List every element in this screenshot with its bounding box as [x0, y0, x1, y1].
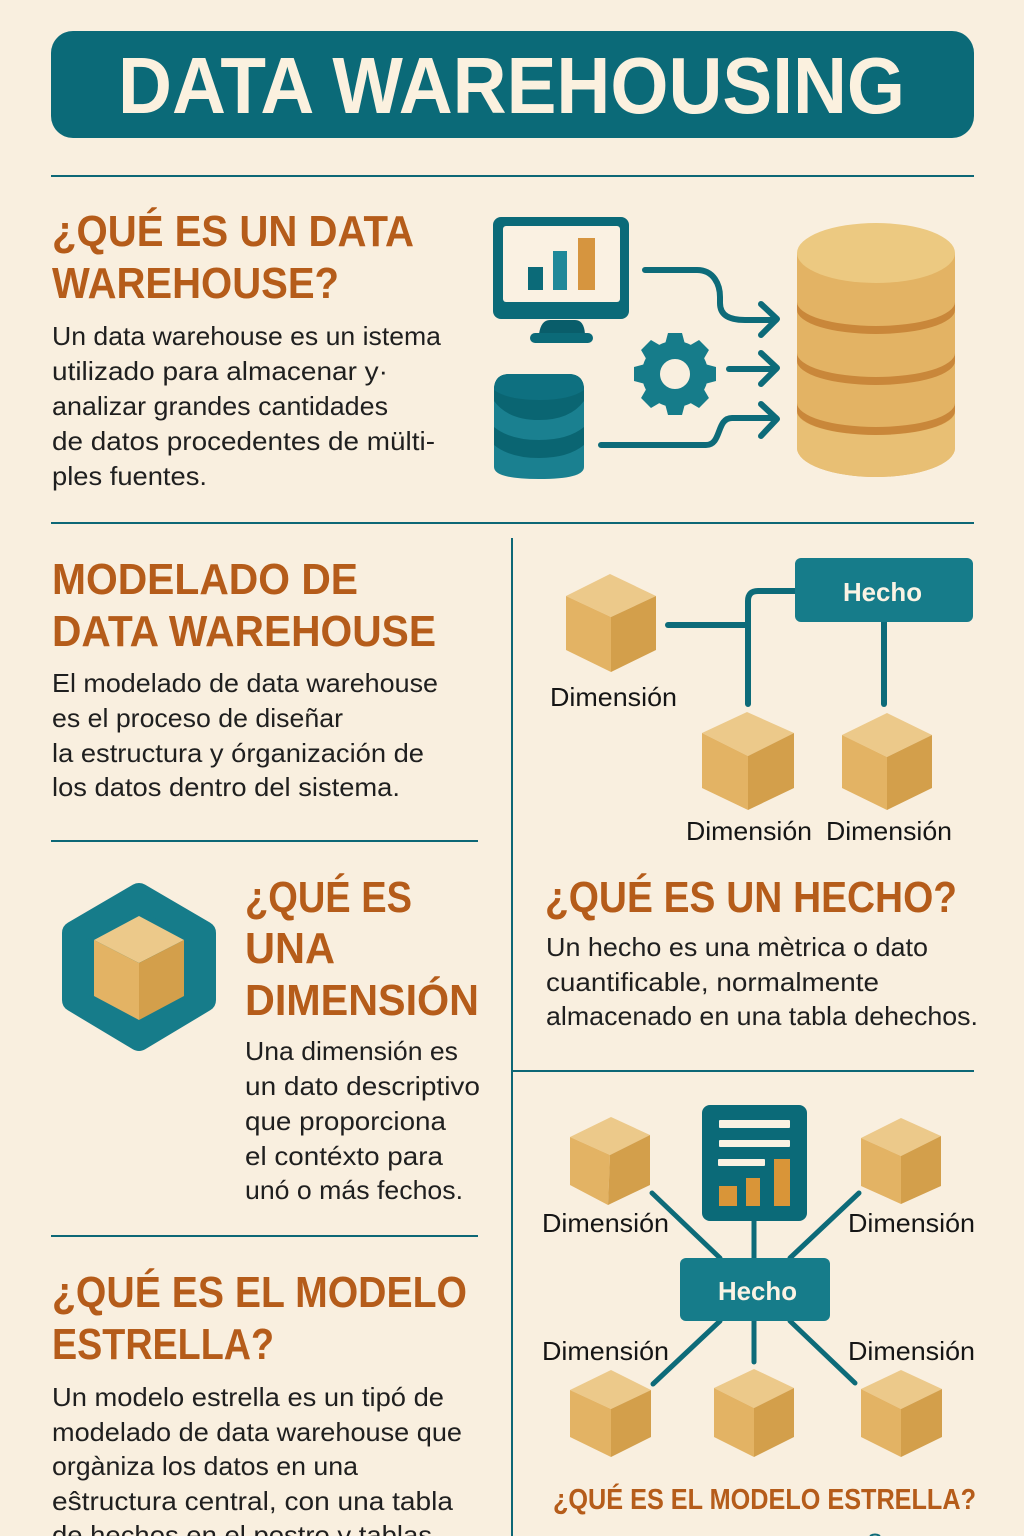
text block: fact definition: cuantificable, normalmente — [546, 967, 879, 997]
panel: what is a fact — [545, 872, 978, 1031]
connector lines — [668, 591, 884, 704]
heading: dimension: ¿QUÉ ES — [245, 872, 412, 922]
text block: modeling definition: es el proceso de diseñar — [52, 703, 343, 733]
panel: what is a dimension — [74, 872, 480, 1205]
text block: data warehouse definition: utilizado para almacenar y· — [52, 356, 388, 386]
text block: dimension definition: el contéxto para — [245, 1141, 444, 1171]
label: dimension bottom left: Dimensión — [542, 1336, 669, 1366]
text block: star model definition: orgàniza los datos en una — [52, 1451, 359, 1481]
fact box — [680, 1258, 830, 1321]
diagram: star schema — [542, 1105, 976, 1516]
text block: data warehouse definition: analizar grandes cantidades — [52, 391, 388, 421]
arrow: gear to warehouse — [729, 353, 777, 384]
icon: cube left — [566, 574, 656, 672]
panel: what is the star model — [52, 1267, 467, 1536]
text block: dimension definition: que proporciona — [245, 1106, 447, 1136]
icon: monitor with bar chart — [493, 217, 629, 343]
text block: fact definition: almacenado en una tabla dehechos. — [546, 1001, 978, 1031]
label: dimension left: Dimensión — [550, 682, 677, 712]
icon: large warehouse cylinder — [797, 223, 955, 477]
icon: cube bottom left — [570, 1370, 651, 1457]
text block: dimension definition — [245, 1036, 480, 1205]
text block: modeling definition: El modelado de data warehouse — [52, 668, 438, 698]
heading: fact: ¿QUÉ ES UN HECHO? — [545, 872, 957, 922]
arrow: monitor to warehouse — [645, 270, 777, 335]
label: dimension top left: Dimensión — [542, 1208, 669, 1238]
text block: modeling definition: la estructura y órganización de — [52, 738, 424, 768]
heading: modeling: DATA WAREHOUSE — [52, 607, 436, 656]
text block: fact definition: Un hecho es una mètrica o dato — [546, 932, 928, 962]
heading: dimension: DIMENSIÓN — [245, 975, 479, 1025]
heading: star model — [52, 1267, 467, 1369]
diagram: fact connected to dimensions — [550, 558, 973, 846]
text block: data warehouse definition — [52, 321, 442, 491]
text block: star model definition: Un modelo estrella es un tipó de — [52, 1382, 444, 1412]
label: dimension bottom right: Dimensión — [848, 1336, 975, 1366]
text block: modeling definition — [52, 668, 438, 802]
fact box — [795, 558, 973, 622]
heading: modeling — [52, 555, 436, 656]
icon: cube top left — [570, 1117, 650, 1205]
icon: gear — [634, 333, 716, 415]
text block: star model definition: modelado de data warehouse que — [52, 1417, 462, 1447]
panel: data warehouse modeling — [52, 555, 438, 802]
title banner — [51, 31, 974, 138]
label: dimension right: Dimensión — [826, 816, 952, 846]
heading: what is a data warehouse: WAREHOUSE? — [52, 259, 339, 308]
heading: dimension — [245, 872, 479, 1025]
heading: star model: ESTRELLA? — [52, 1320, 274, 1369]
text block: star model definition: eŝtructura central, con una tabla — [52, 1486, 454, 1516]
icon: cube top right — [861, 1118, 941, 1204]
illustration: sources flowing into warehouse — [493, 217, 955, 479]
text block: modeling definition: los datos dentro del sistema. — [52, 772, 400, 802]
icon: fact table document — [702, 1105, 807, 1221]
text block: fact definition — [546, 932, 978, 1031]
icon: small database — [494, 374, 584, 479]
text block: dimension definition: un dato descriptivo — [245, 1071, 480, 1101]
text block: star model definition — [52, 1382, 462, 1536]
panel: what is a data warehouse — [52, 206, 442, 491]
text block: data warehouse definition: ples fuentes. — [52, 461, 207, 491]
label: dimension middle: Dimensión — [686, 816, 812, 846]
icon: hexagon with cube — [74, 895, 204, 1039]
heading: dimension: UNA — [245, 924, 335, 973]
title text: DATA WAREHOUSING — [118, 41, 905, 130]
label: dimension top right: Dimensión — [848, 1208, 975, 1238]
heading: what is a data warehouse: ¿QUÉ ES UN DATA — [52, 206, 414, 256]
heading: star model: ¿QUÉ ES EL MODELO — [52, 1267, 467, 1317]
heading: modeling: MODELADO DE — [52, 555, 358, 604]
icon: cube right — [842, 713, 932, 810]
text block: dimension definition: unó o más fechos. — [245, 1175, 463, 1205]
fact box: Hecho — [718, 1276, 797, 1306]
text block: data warehouse definition: de datos procedentes de mülti- — [52, 426, 435, 456]
arrow: database to warehouse — [601, 404, 777, 445]
text block: dimension definition: Una dimensión es — [245, 1036, 458, 1066]
text block: data warehouse definition: Un data warehouse es un istema — [52, 321, 442, 351]
fact box: Hecho — [843, 577, 922, 607]
connector lines — [652, 1193, 859, 1384]
heading: what is a data warehouse — [52, 206, 414, 308]
icon: cube middle — [702, 712, 794, 810]
icon: cube bottom right — [861, 1370, 942, 1457]
icon: cube bottom middle — [714, 1369, 794, 1457]
